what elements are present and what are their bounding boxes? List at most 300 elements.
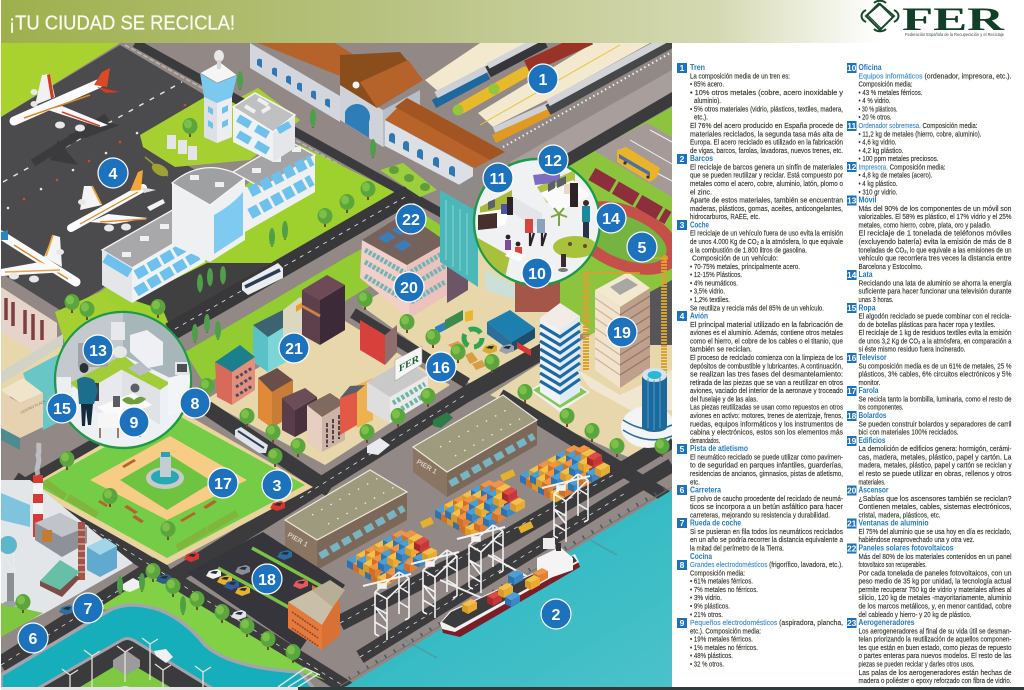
legend entry 8: Grandes electrodomésticos: Composición media:	[690, 568, 745, 577]
badge: 20: 20	[400, 280, 418, 297]
badge: 12	[537, 144, 569, 176]
legend entry 1: Tren: materiales reciclados, la segunda tasa más alta de	[690, 129, 843, 138]
legend entry 13: Móvil: 13	[847, 196, 857, 206]
badge: 10: 10	[528, 266, 546, 283]
legend heading: Cocina: Cocina	[690, 552, 713, 561]
legend entry 3: Coche: Composición de un vehículo:	[692, 254, 778, 263]
legend entry 20: Ascensor	[847, 486, 1012, 519]
warehouse A: PIER 1	[415, 459, 438, 476]
legend entry 9: Pequeños electrodomésticos: • 32 % otros.	[690, 660, 724, 668]
legend entry 4: Avión: El proceso de reciclado comienza con la limpieza de los	[690, 353, 843, 362]
legend entry 8: Grandes electrodomésticos: • 3% vidrio.	[690, 593, 722, 602]
badge: 21	[278, 332, 310, 364]
park	[43, 414, 313, 565]
orange apartment block	[288, 580, 345, 650]
legend entry 15: Ropa: si éste mismo residuo fuera incinerado.	[858, 345, 966, 354]
legend entry 4: Avión: retirada de las piezas que se van a reutilizar en otros	[690, 378, 843, 387]
legend entry 13: Móvil: El reciclaje de 1 tonelada de teléfonos móviles	[858, 229, 1012, 238]
legend entry 11: Ordenador sobremesa: • 4,6 kg vidrio.	[858, 138, 896, 147]
train station	[250, 43, 505, 197]
blue locomotive and carriages	[434, 75, 488, 104]
badge: 1	[527, 63, 559, 95]
bottom edge strip	[1, 687, 1024, 690]
legend entry 7: Rueda de coche: Rueda de coche	[690, 519, 742, 528]
legend entry 9: Pequeños electrodomésticos: • 19% metales férricos.	[690, 635, 753, 644]
legend entry 12: Impresora	[847, 162, 946, 196]
legend entry 4: Avión: aviones, vaciado del interior de la aeronave y troceado	[690, 386, 843, 395]
legend entry 23: Aerogeneradores: Aerogeneradores	[858, 618, 915, 627]
recycling symbol	[464, 329, 482, 347]
legend entry 8: Grandes electrodomésticos: • 9% plásticos.	[690, 602, 730, 610]
legend entry 13: Móvil: Barcelona y Estocolmo.	[858, 262, 922, 271]
legend entry 8: Grandes electrodomésticos	[677, 560, 843, 619]
legend entry 4: Avión: se realizan las tres fases del desmantelamiento:	[690, 370, 843, 378]
legend entry 6: Carretera: carreteras, mejorando su resistencia y durabilidad.	[690, 510, 830, 519]
legend entry 20: Ascensor: ¿Sabías que los ascensores también se reciclan?	[858, 494, 1012, 503]
legend entry 22: Paneles solares fotovoltaicos: del cableado y hierro- y 20 kg de plástico.	[858, 610, 972, 619]
legend entry 13: Móvil: (excluyendo batería) evita la emisión de más de 8	[858, 237, 1012, 246]
low buildings behind office circle	[485, 270, 560, 312]
airport bus	[242, 263, 283, 295]
badge: 4	[97, 157, 129, 189]
legend entry 20: Ascensor: cristal, madera, plásticos, etc.	[858, 510, 940, 519]
legend entry 23: Aerogeneradores: piezas se pueden reciclar y darles otros usos.	[858, 660, 974, 668]
legend entry 5: Pista de atletismo: 5	[680, 444, 685, 454]
building 21: teal glass	[253, 310, 295, 372]
legend entry 7: Rueda de coche: la mitad del perímetro de la Tierra.	[690, 544, 784, 552]
legend entry 4: Avión: 4	[680, 311, 685, 321]
legend entry 10: Oficina: Oficina	[858, 63, 882, 72]
teal glass tower with solar roof	[440, 172, 483, 287]
badge: 9: 9	[130, 415, 139, 432]
legend entry 5: Pista de atletismo: residencias de ancianos, gimnasios, pistas de atletismo,	[690, 469, 843, 478]
legend entry 8: Grandes electrodomésticos: • 61% metales férricos.	[690, 577, 753, 586]
legend entry 7: Rueda de coche: 7	[680, 518, 685, 528]
warehouse B	[285, 470, 407, 570]
legend entry 19: Edificios: Edificios	[858, 436, 886, 445]
trains	[434, 36, 672, 139]
legend entry 21: Ventanas de aluminio: 21	[847, 518, 857, 528]
legend entry 18: Bolardos: 18	[847, 411, 857, 421]
badge: 5: 5	[638, 240, 647, 257]
badge: 15: 15	[53, 401, 71, 418]
legend entry 9: Pequeños electrodomésticos: Pequeños electrodomésticos (aspiradora, plancha,	[690, 618, 843, 627]
badge: 9	[118, 406, 150, 438]
legend entry 16: Televisor	[847, 353, 1012, 387]
legend entry 20: Ascensor: 20	[847, 486, 857, 496]
parking lot	[184, 501, 345, 650]
badge: 4: 4	[109, 166, 118, 183]
legend entry 1: Tren: de vigas, barcos, farolas, lavadoras, nuevos trenes, etc.	[690, 146, 843, 155]
legend entry 3: Coche: de unos 4.000 Kg de CO₂ a la atmósfera, lo que equivale	[690, 237, 843, 246]
legend entry 19: Edificios: cas, madera, metales, plástico, papel y cartón. La	[858, 452, 1012, 461]
legend entry 5: Pista de atletismo: El neumático reciclado se puede utilizar como pavimen-	[690, 452, 843, 461]
legend entry 9: Pequeños electrodomésticos: 9	[680, 618, 685, 628]
helicopter	[144, 156, 168, 176]
seated women	[505, 240, 511, 250]
legend entry 4: Avión: demandados.	[690, 436, 720, 445]
legend entry 3: Coche: El reciclaje de un vehículo fuera de uso evita la emisión	[690, 229, 843, 238]
legend entry 4: Avión: El principal material utilizado en la fabricación de	[690, 320, 843, 329]
legend entry 5: Pista de atletismo: to de seguridad en parques infantiles, guarderías,	[690, 461, 843, 470]
legend entry 18: Bolardos: Bolardos	[858, 411, 887, 420]
legend entry 1: Tren: El 76% del acero producido en España procede de	[690, 121, 843, 130]
badge: 1: 1	[539, 72, 548, 89]
legend entry 6: Carretera: 6	[680, 485, 685, 495]
inset: office circle	[474, 159, 600, 285]
icon: green knot	[862, 1, 898, 31]
stadium athletics track and parking	[560, 107, 672, 335]
table and plant	[97, 393, 152, 420]
legend entry 7: Rueda de coche: en un año se podría recorrer la distancia equivalente a	[690, 535, 844, 544]
tall beige building under construction	[575, 255, 672, 410]
badge: 8: 8	[191, 396, 200, 413]
building: orange	[258, 368, 293, 428]
isometric city map	[0, 36, 691, 690]
lime desk partitions	[480, 190, 512, 227]
truck on peninsula	[154, 649, 173, 663]
legend entry 4: Avión: también se reciclan.	[690, 345, 752, 354]
FER wordmark: FER	[902, 2, 1006, 38]
legend entry 15: Ropa: 15	[847, 303, 857, 313]
road beside station	[567, 92, 672, 166]
badge: 13: 13	[89, 343, 107, 360]
blue cylinder tower	[621, 368, 675, 448]
chairs	[98, 413, 118, 428]
legend entry 2: Barcos: El reciclaje de barcos genera un sinfín de materiales	[690, 162, 843, 171]
legend entry 21: Ventanas de aluminio: habiéndose reaprovechado una y otra vez.	[858, 535, 974, 544]
lawn and road network	[55, 43, 455, 385]
legend entry 19: Edificios: 19	[847, 436, 857, 446]
purple storage	[533, 172, 560, 185]
legend entry 10: Oficina: • 20 % otros.	[858, 113, 892, 122]
tank wagons	[462, 72, 525, 108]
FER subtitle: Federación Española de la Recuperación y el Reciclaje	[905, 32, 1004, 38]
blue plant	[1, 493, 30, 527]
fuel boxes	[167, 135, 197, 160]
airport control building	[233, 93, 295, 162]
inset: kitchen circle	[50, 310, 195, 448]
badge: 18: 18	[258, 572, 276, 589]
red striped chimney	[33, 475, 43, 537]
row of small buildings	[340, 378, 373, 435]
legend entry 17: Farola: los componentes.	[858, 403, 904, 412]
base cabinets	[122, 370, 160, 425]
legend entry 11: Ordenador sobremesa: • 4,2 kg plástico.	[858, 146, 904, 155]
legend entry 2: Barcos: que se pueden reutilizar y reciclar. Está compuesto por	[690, 171, 843, 180]
legend entry 4: Avión: aviones en activo: motores, trenes de aterrizaje, frenos,	[690, 411, 843, 420]
legend entry 23: Aerogeneradores	[847, 618, 1012, 685]
legend entry 12: Impresora: • 4 kg plástico.	[858, 179, 898, 188]
blue office	[87, 538, 117, 577]
legend entry 3: Coche: 3	[680, 220, 685, 230]
building: red with teal roof	[215, 345, 255, 405]
legend entry 4: Avión: cabina y electrónicos, estos son los elementos más	[690, 428, 843, 436]
monitors	[548, 180, 555, 192]
badge: 7	[72, 592, 104, 624]
water at port	[340, 484, 672, 690]
deck containers	[487, 591, 502, 606]
building: cream with sign	[283, 297, 310, 350]
badge: 17: 17	[214, 476, 232, 493]
badge: 21: 21	[285, 341, 303, 358]
street traffic	[59, 412, 453, 615]
shopping centre: CENTRO PLAZA	[20, 399, 47, 415]
legend entry 13: Móvil	[847, 196, 1012, 271]
legend entry 15: Ropa	[847, 303, 1012, 354]
airport grounds and runway	[1, 43, 340, 312]
legend entry 12: Impresora: Impresora. Composición media:	[858, 162, 946, 171]
trees	[16, 71, 670, 663]
legend entry 1: Tren	[677, 63, 843, 155]
badge: 22: 22	[402, 212, 420, 229]
container yards	[347, 445, 610, 588]
legend entry 11: Ordenador sobremesa: • 100 ppm metales preciosos.	[858, 154, 938, 163]
fountain	[146, 467, 184, 489]
legend entry 5: Pista de atletismo: Pista de atletismo	[690, 444, 748, 453]
legend entry 2: Barcos: Barcos	[690, 154, 714, 163]
legend entry 6: Carretera: El polvo de caucho procedente del reciclado de neumá-	[690, 494, 843, 503]
legend entry 1: Tren: La composición media de un tren es:	[690, 71, 790, 80]
legend entry 4: Avión: depósitos de combustible y lubricantes. A continuación,	[690, 361, 843, 370]
badge: 13	[82, 334, 114, 366]
legend entry 12: Impresora: • 310 gr vidrio.	[858, 187, 898, 196]
badge: 12: 12	[544, 153, 562, 170]
legend entry 19: Edificios: materiales.	[858, 477, 886, 486]
legend entry 2: Barcos: 2	[680, 154, 685, 164]
lakeside green and lake	[1, 575, 325, 690]
legend entry 17: Farola: 17	[847, 386, 857, 396]
road beyond construction site	[650, 280, 672, 345]
badge: 8	[179, 387, 211, 419]
legend entry 14: Lata: unas 3 horas.	[858, 295, 894, 304]
legend entry 12: Impresora: 12	[847, 162, 857, 172]
badge: 15	[46, 392, 78, 424]
badge: 6	[17, 622, 49, 654]
legend entry 20: Ascensor: Ascensor	[858, 486, 888, 494]
legend entry 4: Avión: Las piezas reutilizadas se usan como repuestos en otros	[690, 403, 843, 412]
legend entry 2: Barcos: maderas, plásticos, gomas, aceites, anticongelantes,	[690, 204, 843, 213]
recycling plant	[435, 310, 535, 370]
legend entry 1: Tren: • 10% otros metales (cobre, acero inoxidable y	[690, 88, 843, 97]
legend entry 4: Avión: como el hierro, el cobre de los cables o el titanio, que	[690, 336, 843, 345]
badge: 11	[482, 162, 514, 194]
legend entry 8: Grandes electrodomésticos: 8	[680, 560, 685, 570]
badge: 14	[595, 202, 627, 234]
badge: 16	[425, 351, 457, 383]
badge: 19	[606, 316, 638, 348]
water tower	[0, 536, 17, 554]
legend entry 3: Coche: • 4% neumáticos.	[690, 278, 738, 287]
wind turbines	[62, 638, 211, 690]
legend entry 9: Pequeños electrodomésticos: etc.). Composición media:	[690, 626, 761, 635]
legend entry 11: Ordenador sobremesa: 11	[847, 121, 856, 131]
badge: 11: 11	[490, 171, 507, 188]
water ripples	[405, 540, 617, 658]
badge: 23 (cropped at bottom edge)	[109, 686, 141, 690]
city blocks	[1, 235, 672, 465]
standing woman	[582, 206, 590, 222]
legend entry 9: Pequeños electrodomésticos	[677, 618, 843, 668]
legend entry 14: Lata: 14	[847, 270, 857, 280]
legend entry 5: Pista de atletismo: etc.	[690, 477, 700, 486]
seated workers	[507, 197, 513, 215]
desks	[478, 208, 510, 230]
legend column 2	[847, 63, 1012, 685]
legend entry 4: Avión: del fuselaje y de las alas.	[690, 394, 758, 403]
badge: 16: 16	[432, 360, 450, 377]
purple building	[447, 240, 468, 303]
legend entry 3: Coche: • 3,5% vidrio.	[690, 287, 725, 296]
factory area	[0, 443, 133, 637]
legend entry 21: Ventanas de aluminio: Ventanas de aluminio	[858, 519, 929, 528]
badge: 18	[251, 563, 283, 595]
freight cars	[527, 38, 590, 67]
legend entry 18: Bolardos: bici con materiales 100% reciclados.	[858, 428, 958, 436]
badge: 2	[540, 598, 572, 630]
man on phone	[80, 363, 88, 373]
legend entry 10: Oficina: • 30 % plásticos.	[858, 104, 898, 113]
warehouse B: PIER 1	[286, 532, 309, 549]
legend entry 10: Oficina: • 4 % vidrio.	[858, 96, 890, 105]
legend entry 6: Carretera	[677, 485, 843, 519]
legend entry 16: Televisor: monitor.	[858, 378, 880, 387]
yellow locomotive and grey carriages	[494, 110, 552, 139]
shopping centre	[1, 334, 63, 450]
kitchen walls	[50, 310, 123, 395]
badge: 2: 2	[552, 607, 561, 624]
FER office building: FER	[399, 352, 419, 375]
blue and white skyscraper	[530, 303, 590, 412]
badge: 3	[261, 469, 293, 501]
badge: 19: 19	[613, 325, 631, 342]
legend entry 4: Avión	[677, 311, 843, 445]
badge: 14: 14	[602, 211, 620, 228]
legend entry 16: Televisor: Televisor	[858, 353, 886, 362]
building: dark purple	[302, 275, 345, 345]
legend entry 22: Paneles solares fotovoltaicos: 22	[847, 544, 857, 554]
teal sheds	[40, 575, 80, 597]
ship bridge	[537, 547, 573, 578]
legend entry 11: Ordenador sobremesa: • 11,2 kg de metales (hierro, cobre, aluminio).	[858, 129, 982, 138]
badge: 22	[395, 203, 427, 235]
legend column 1	[677, 63, 844, 668]
worktop	[70, 355, 133, 393]
legend entry 14: Lata	[847, 270, 1012, 304]
legend entry 18: Bolardos	[847, 411, 1012, 436]
cranes	[586, 258, 664, 378]
legend entry 15: Ropa: do de botellas plásticas para hacer ropa y textiles.	[858, 320, 996, 329]
legend entry 3: Coche: Coche	[690, 220, 709, 229]
legend entry 6: Carretera: Carretera	[690, 486, 722, 494]
badge: 20	[393, 271, 425, 303]
legend entry 22: Paneles solares fotovoltaicos: fotovoltaico son recuperables.	[858, 560, 926, 569]
airport vehicle	[147, 199, 165, 211]
legend entry 1: Tren: Europa. El acero reciclado es utilizado en la fabricación	[690, 138, 843, 147]
legend entry 14: Lata: Lata	[858, 270, 873, 279]
building 20: pink	[360, 213, 447, 318]
legend entry 8: Grandes electrodomésticos: • 21% otros.	[690, 610, 723, 619]
fridge and microwave	[168, 372, 190, 416]
legend entry 13: Móvil: metales, como hierro, cobre, plata, oro y paladio.	[858, 220, 992, 229]
FER sign	[395, 346, 422, 381]
legend entry 7: Rueda de coche	[677, 518, 844, 552]
brick chimney	[78, 522, 85, 580]
badge: 7: 7	[84, 601, 93, 618]
legend entry 6: Carretera: ticos se incorpora a un betún asfáltico para hacer	[690, 502, 843, 511]
badge: 6: 6	[29, 631, 38, 648]
legend entry 2: Barcos: el zinc.	[690, 187, 712, 196]
legend entry 10: Oficina: Equipos informáticos (ordenador, impresora, etc.).	[858, 71, 1012, 80]
legend entry 10: Oficina: Composición media:	[858, 80, 912, 89]
legend entry 9: Pequeños electrodomésticos: • 48% plásticos.	[690, 651, 733, 660]
legend entry 1: Tren: etc.).	[694, 113, 708, 122]
legend entry 3: Coche: • 12-15% Plásticos.	[690, 270, 742, 279]
city streets	[1, 313, 672, 690]
white appliances	[130, 330, 163, 368]
badge: 5	[626, 231, 658, 263]
port cranes	[363, 474, 590, 640]
legend entry 15: Ropa: Ropa	[858, 303, 876, 312]
legend entry 3: Coche: Se reutiliza y recicla más del 85% de un vehículo.	[690, 303, 824, 312]
legend entry 2: Barcos	[677, 154, 843, 221]
legend entry 11: Ordenador sobremesa	[847, 121, 982, 163]
legend entry 22: Paneles solares fotovoltaicos	[847, 544, 1012, 619]
legend entry 1: Tren: • 5% otros materiales (vidrio, plásticos, textiles, madera,	[690, 104, 843, 113]
airplane: red tail	[14, 68, 120, 165]
legend entry 2: Barcos: Aparte de estos materiales, también se encuentran	[690, 196, 843, 205]
legend entry 23: Aerogeneradores: 23	[847, 618, 857, 628]
left brown building	[1, 287, 57, 352]
legend entry 22: Paneles solares fotovoltaicos: Paneles solares fotovoltaicos	[858, 544, 954, 552]
railway platforms	[425, 43, 672, 163]
legend entry 10: Oficina: • 43 % metales férricos.	[858, 88, 922, 97]
legend entry 2: Barcos: metales como el acero, cobre, aluminio, latón, plomo o	[690, 179, 843, 188]
trucks	[420, 469, 534, 533]
legend entry 17: Farola: Farola	[858, 386, 879, 395]
legend entry 16: Televisor: 16	[847, 353, 857, 363]
legend entry 3: Coche	[677, 220, 843, 312]
school bus	[617, 147, 660, 182]
legend entry 11: Ordenador sobremesa: Ordenador sobremesa. Composición media:	[858, 121, 978, 130]
control tower	[200, 50, 237, 143]
colleagues talking	[525, 219, 533, 233]
legend entry 10: Oficina: 10	[847, 63, 857, 73]
airport terminal	[102, 140, 315, 303]
legend entry 1: Tren: 1	[680, 63, 685, 73]
legend entry 8: Grandes electrodomésticos: Grandes electrodomésticos (frigorífico, lavadora, etc.).	[690, 560, 843, 569]
oven	[90, 383, 99, 401]
legend entry 1: Tren: Tren	[690, 63, 705, 72]
legend entry 9: Pequeños electrodomésticos: • 1% metales no férricos.	[690, 643, 758, 652]
airplane: lower left	[1, 230, 76, 282]
badge: 3: 3	[273, 478, 282, 495]
legend entry 2: Barcos: hidrocarburos, RAEE, etc.	[690, 212, 760, 221]
legend entry 12: Impresora: • 4,8 kg de metales (acero).	[858, 171, 932, 180]
legend entry 4: Avión: aviones es el aluminio. Además, contiene otros metales	[690, 328, 843, 337]
red building behind	[360, 320, 385, 365]
legend entry 10: Oficina	[847, 63, 1012, 122]
legend entry 1: Tren: • 85% acero.	[690, 80, 724, 89]
containers	[435, 322, 445, 335]
badge: 17	[207, 467, 239, 499]
legend entry 19: Edificios	[847, 436, 1012, 486]
legend entry 8: Grandes electrodomésticos: • 7% metales no férricos.	[690, 585, 758, 594]
legend entry 5: Pista de atletismo	[677, 444, 843, 486]
legend entry 3: Coche: a la combustión de 1.800 litros de gasolina.	[690, 245, 807, 254]
legend entry 20: Ascensor: Contienen metales, cables, sistemas electrónicos,	[858, 502, 1012, 511]
badge: 10	[521, 257, 553, 289]
